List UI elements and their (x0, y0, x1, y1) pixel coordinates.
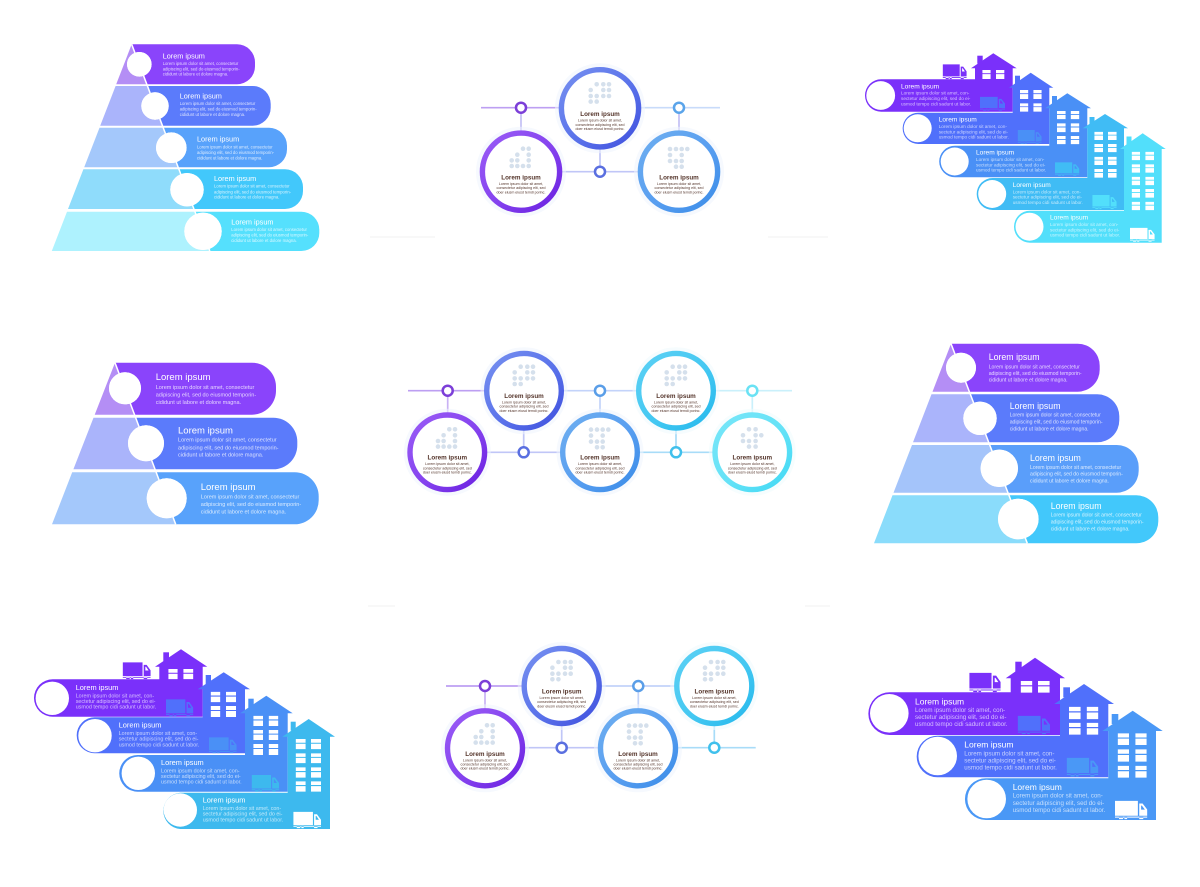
step: blue circle: Lorem ipsum dolor sit amet, (657, 182, 701, 186)
step 2: house and truck: usmod tempo cidi sadunt ut labor. (939, 135, 1009, 140)
step 4: house and truck: usmod tempo cidi sadunt ut labor. (203, 817, 283, 823)
step 4: house and truck: sectetur adipiscing elit, sed do ei- (203, 812, 283, 818)
tier 3 (84, 128, 287, 167)
tier 5 (52, 212, 319, 251)
step 4: house and truck (163, 719, 335, 829)
tier 4 (874, 495, 1158, 543)
tier 2: Lorem ipsum (178, 425, 233, 436)
tier 2: Lorem ipsum dolor sit amet, consectetur (178, 438, 277, 444)
step 3: house and truck (939, 93, 1091, 177)
step: indigo circle: Lorem ipsum (580, 111, 620, 118)
step: indigo circle: Lorem ipsum dolor sit amet, (578, 119, 622, 123)
step 2: house and truck: Lorem ipsum (964, 739, 1013, 749)
step 3: house and truck: usmod tempo cidi sadunt ut labor. (976, 168, 1046, 173)
step 3: house and truck: Lorem ipsum dolor sit amet, con- (976, 157, 1045, 162)
tier 5: Lorem ipsum dolor sit amet, consectetur (231, 227, 307, 232)
tier 1 (932, 344, 1100, 392)
step: purple circle: doer eiusm eiusd temdi porinc. (497, 190, 545, 194)
tier 3: Lorem ipsum dolor sit amet, consectetur (197, 144, 273, 149)
tier 1: Lorem ipsum dolor sit amet, consectetur (989, 364, 1080, 370)
tier 3: adipiscing elit, sed do eiusmod temporin- (197, 150, 275, 155)
tier 2 (73, 418, 297, 469)
step: blue circle (634, 127, 724, 217)
panel: five-tier pyramid (52, 44, 319, 251)
tier 3: adipiscing elit, sed do eiusmod temporin- (1030, 472, 1123, 478)
step 2: house and truck (917, 684, 1114, 777)
step 5: house and truck: sectetur adipiscing elit, sed do ei- (1050, 227, 1120, 232)
step: cyan circle: Lorem ipsum dolor sit amet, (692, 696, 736, 700)
step 2: house and truck: sectetur adipiscing elit, sed do ei- (964, 757, 1056, 764)
step: indigo circle: consectetur adipiscing elit, sed (576, 123, 624, 127)
step 3: house and truck: sectetur adipiscing elit, sed do ei- (976, 162, 1046, 167)
step 2: house and truck: Lorem ipsum (119, 721, 161, 730)
step: indigo circle (518, 642, 606, 730)
tier 5: Lorem ipsum (231, 217, 273, 226)
step: indigo circle (555, 63, 645, 153)
step: blue circle: consectetur adipiscing elit, sed (576, 466, 624, 470)
tier 3: Lorem ipsum dolor sit amet, consectetur (201, 494, 300, 500)
step 2: house and truck (77, 672, 250, 753)
step: light cyan circle: Lorem ipsum dolor sit amet, (730, 462, 774, 466)
step: purple circle: Lorem ipsum dolor sit amet, (425, 462, 469, 466)
step: purple circle (441, 704, 529, 792)
step 2: house and truck: Lorem ipsum dolor sit amet, con- (119, 731, 197, 737)
tier 2: adipiscing elit, sed do eiusmod temporin- (180, 107, 257, 112)
step 1: house and truck (34, 649, 207, 717)
step: light cyan circle: consectetur adipiscing elit, sed (728, 466, 777, 470)
step: cyan circle: doer eiusm eiusd temdi porinc. (690, 704, 739, 708)
tier 4: cididunt ut labore et dolore magna. (214, 195, 279, 200)
step 5: house and truck (1014, 133, 1166, 243)
step 3: house and truck: Lorem ipsum dolor sit amet, con- (161, 768, 240, 774)
step: blue circle: doer eiusm eiusd temdi porinc. (655, 190, 703, 194)
step 3: house and truck: Lorem ipsum (976, 149, 1015, 156)
tier 1: cididunt ut labore et dolore magna. (163, 72, 228, 77)
tier 1: Lorem ipsum dolor sit amet, consectetur (163, 61, 239, 66)
tier 1: cididunt ut labore et dolore magna. (989, 378, 1068, 384)
tier 4: Lorem ipsum (1051, 501, 1102, 511)
step: cyan circle (632, 347, 720, 434)
tier 1: adipiscing elit, sed do eiusmod temporin- (156, 393, 256, 399)
panel: five-step housing bars (865, 53, 1166, 243)
step 3: house and truck: usmod tempo cidi sadunt ut labor. (1013, 807, 1106, 814)
step 2: house and truck: usmod tempo cidi sadunt ut labor. (964, 764, 1057, 771)
step: indigo circle: doer eiusm eiusd temdi porinc. (576, 127, 624, 131)
panel: four-tier pyramid (874, 344, 1158, 543)
step: purple circle: Lorem ipsum (428, 455, 467, 462)
tier 3: cididunt ut labore et dolore magna. (1030, 478, 1109, 484)
step: indigo circle: Lorem ipsum dolor sit amet, (540, 696, 584, 700)
step: indigo circle: doer eiusm eiusd temdi porinc. (537, 704, 586, 708)
step: purple circle (404, 409, 491, 496)
step 1: house and truck: sectetur adipiscing elit, sed do ei- (915, 714, 1006, 721)
step 5: house and truck: Lorem ipsum dolor sit amet, con- (1050, 222, 1119, 227)
tier 1 (116, 44, 255, 84)
step: purple circle: Lorem ipsum (465, 751, 505, 758)
panel: four-step circle network (441, 642, 758, 792)
tier 4: Lorem ipsum (214, 174, 256, 183)
step: indigo circle: doer eiusm eiusd temdi porinc. (500, 409, 548, 413)
tier 1: cididunt ut labore et dolore magna. (156, 400, 242, 406)
step: purple circle: consectetur adipiscing elit, sed (461, 762, 509, 766)
step: indigo circle: Lorem ipsum (504, 393, 544, 400)
step 3: house and truck: sectetur adipiscing elit, sed do ei- (1013, 800, 1104, 807)
step 4: house and truck: Lorem ipsum (1013, 182, 1051, 189)
step 1: house and truck (868, 658, 1065, 735)
step 1: house and truck: Lorem ipsum (76, 683, 118, 692)
tier 1: adipiscing elit, sed do eiusmod temporin- (989, 371, 1082, 377)
step 4: house and truck: Lorem ipsum (203, 796, 245, 805)
tier 3: Lorem ipsum (197, 135, 239, 144)
tier 2: cididunt ut labore et dolore magna. (178, 453, 264, 459)
step 1: house and truck: sectetur adipiscing elit, sed do ei- (901, 96, 971, 101)
tier 3: cididunt ut labore et dolore magna. (197, 155, 262, 160)
tier 2: Lorem ipsum (1010, 401, 1061, 411)
step 1: house and truck: usmod tempo cidi sadunt ut labor. (915, 721, 1008, 728)
tier 3: cididunt ut labore et dolore magna. (201, 509, 287, 515)
step: blue circle: Lorem ipsum (618, 751, 658, 758)
connector nodes (443, 386, 757, 457)
step 1: house and truck: usmod tempo cidi sadunt ut labor. (901, 101, 971, 106)
step 3: house and truck: sectetur adipiscing elit, sed do ei- (161, 774, 241, 780)
step: light cyan circle: doer eiusm eiusd temdi porinc. (728, 470, 777, 474)
step: cyan circle: Lorem ipsum (656, 393, 696, 400)
step 5: house and truck: Lorem ipsum (1050, 215, 1089, 222)
tier 2: Lorem ipsum (180, 91, 222, 100)
step 2: house and truck: usmod tempo cidi sadunt ut labor. (119, 743, 199, 749)
step: purple circle: Lorem ipsum dolor sit amet, (499, 182, 543, 186)
step: purple circle: doer eiusm eiusd temdi porinc. (461, 767, 509, 771)
step: purple circle (476, 127, 566, 217)
step: purple circle: consectetur adipiscing elit, sed (497, 186, 545, 190)
step 4: house and truck (977, 114, 1128, 210)
step 3: house and truck (965, 711, 1163, 820)
step: blue circle: doer eiusm eiusd temdi porinc. (614, 767, 662, 771)
tier 1: Lorem ipsum (163, 51, 205, 60)
panel: three-step housing bars (868, 658, 1163, 820)
connector nodes (516, 103, 684, 177)
step 5: house and truck: usmod tempo cidi sadunt ut labor. (1050, 233, 1120, 238)
panel: three-tier pyramid (52, 363, 319, 524)
step: blue circle: Lorem ipsum (659, 174, 699, 181)
step: indigo circle (480, 347, 568, 434)
tier 1: Lorem ipsum (156, 372, 211, 383)
step: light cyan circle (709, 409, 796, 496)
step 2: house and truck: Lorem ipsum dolor sit amet, con- (939, 124, 1007, 129)
step: purple circle: doer eiusm eiusd temdi porinc. (423, 470, 472, 474)
step 3: house and truck: Lorem ipsum dolor sit amet, con- (1013, 793, 1103, 800)
tier 2: cididunt ut labore et dolore magna. (1010, 426, 1089, 432)
step 2: house and truck (903, 73, 1053, 144)
step: blue circle (594, 704, 682, 792)
step: cyan circle: Lorem ipsum dolor sit amet, (654, 401, 698, 405)
step: purple circle: consectetur adipiscing elit, sed (423, 466, 472, 470)
tier 3: Lorem ipsum (201, 482, 256, 493)
tier 4: cididunt ut labore et dolore magna. (1051, 526, 1130, 532)
step: indigo circle: consectetur adipiscing elit, sed (500, 405, 548, 409)
tier 1: adipiscing elit, sed do eiusmod temporin- (163, 66, 240, 71)
connector nodes (480, 681, 719, 753)
tier 5: cididunt ut labore et dolore magna. (231, 238, 297, 243)
step: cyan circle (670, 642, 758, 730)
panel: five-step circle network (404, 347, 796, 496)
step: blue circle: doer eiusm eiusd temdi porinc. (576, 470, 624, 474)
step 3: house and truck: usmod tempo cidi sadunt ut labor. (161, 780, 242, 786)
step: blue circle: consectetur adipiscing elit, sed (655, 186, 703, 190)
step 3: house and truck: Lorem ipsum (161, 758, 204, 767)
step 2: house and truck: sectetur adipiscing elit, sed do ei- (119, 737, 199, 743)
step 1: house and truck: Lorem ipsum dolor sit amet, con- (76, 693, 154, 699)
tier 1: Lorem ipsum dolor sit amet, consectetur (156, 385, 255, 391)
tier 1: Lorem ipsum (989, 352, 1040, 362)
panel: three-step circle network (476, 63, 724, 217)
step 1: house and truck: Lorem ipsum dolor sit amet, con- (901, 91, 970, 96)
step 1: house and truck: sectetur adipiscing elit, sed do ei- (76, 699, 156, 705)
tier 2: Lorem ipsum dolor sit amet, consectetur (180, 101, 256, 106)
step 1: house and truck: Lorem ipsum (901, 83, 940, 90)
step 3: house and truck (119, 696, 293, 792)
tier 2: Lorem ipsum dolor sit amet, consectetur (1010, 413, 1101, 419)
tier 4: adipiscing elit, sed do eiusmod temporin- (214, 189, 292, 194)
step 4: house and truck: sectetur adipiscing elit, sed do ei- (1013, 195, 1082, 200)
step: indigo circle: Lorem ipsum dolor sit amet, (502, 401, 546, 405)
panel: four-step housing bars (34, 649, 335, 829)
step: blue circle: consectetur adipiscing elit, sed (614, 762, 662, 766)
tier 2: adipiscing elit, sed do eiusmod temporin- (178, 445, 279, 451)
step: purple circle: Lorem ipsum (501, 174, 541, 181)
tier 4: adipiscing elit, sed do eiusmod temporin- (1051, 520, 1144, 526)
step 4: house and truck: usmod tempo cidi sadunt ut labor. (1013, 200, 1083, 205)
step 1: house and truck (865, 53, 1017, 112)
step: blue circle: Lorem ipsum dolor sit amet, (616, 758, 660, 762)
tier 2 (100, 86, 271, 126)
step: blue circle: Lorem ipsum (580, 455, 620, 462)
tier 4: Lorem ipsum dolor sit amet, consectetur (214, 184, 290, 189)
tier 3 (894, 445, 1139, 493)
step: cyan circle: Lorem ipsum (695, 689, 734, 696)
step: light cyan circle: Lorem ipsum (733, 455, 772, 462)
step: purple circle: Lorem ipsum dolor sit amet, (463, 758, 507, 762)
step 1: house and truck: Lorem ipsum (915, 696, 964, 706)
step: indigo circle: consectetur adipiscing elit, sed (537, 700, 586, 704)
step: cyan circle: consectetur adipiscing elit, sed (652, 405, 700, 409)
tier 4 (68, 169, 303, 209)
step: blue circle (556, 409, 644, 496)
tier 2: cididunt ut labore et dolore magna. (180, 112, 245, 117)
tier 4: Lorem ipsum dolor sit amet, consectetur (1051, 513, 1142, 519)
tier 3: Lorem ipsum dolor sit amet, consectetur (1030, 465, 1121, 471)
step 4: house and truck: Lorem ipsum dolor sit amet, con- (203, 806, 281, 812)
step 3: house and truck: Lorem ipsum (1013, 782, 1062, 792)
tier 3: Lorem ipsum (1030, 453, 1081, 463)
step 2: house and truck: Lorem ipsum (939, 117, 977, 124)
step 2: house and truck: sectetur adipiscing elit, sed do ei- (939, 129, 1008, 134)
step: blue circle: Lorem ipsum dolor sit amet, (578, 462, 622, 466)
tier 3 (52, 472, 319, 524)
tier 5: adipiscing elit, sed do eiusmod temporin- (231, 232, 309, 237)
step 1: house and truck: Lorem ipsum dolor sit amet, con- (915, 707, 1005, 714)
step: cyan circle: doer eiusm eiusd temdi porinc. (652, 409, 700, 413)
tier 2: adipiscing elit, sed do eiusmod temporin- (1010, 419, 1103, 425)
tier 3: adipiscing elit, sed do eiusmod temporin- (201, 502, 301, 508)
step: indigo circle: Lorem ipsum (542, 689, 582, 696)
tier 2 (913, 394, 1119, 442)
tier 1 (95, 363, 276, 415)
step: cyan circle: consectetur adipiscing elit, sed (690, 700, 739, 704)
step 1: house and truck: usmod tempo cidi sadunt ut labor. (76, 705, 156, 711)
step 2: house and truck: Lorem ipsum dolor sit amet, con- (964, 750, 1054, 757)
step 4: house and truck: Lorem ipsum dolor sit amet, con- (1013, 189, 1081, 194)
